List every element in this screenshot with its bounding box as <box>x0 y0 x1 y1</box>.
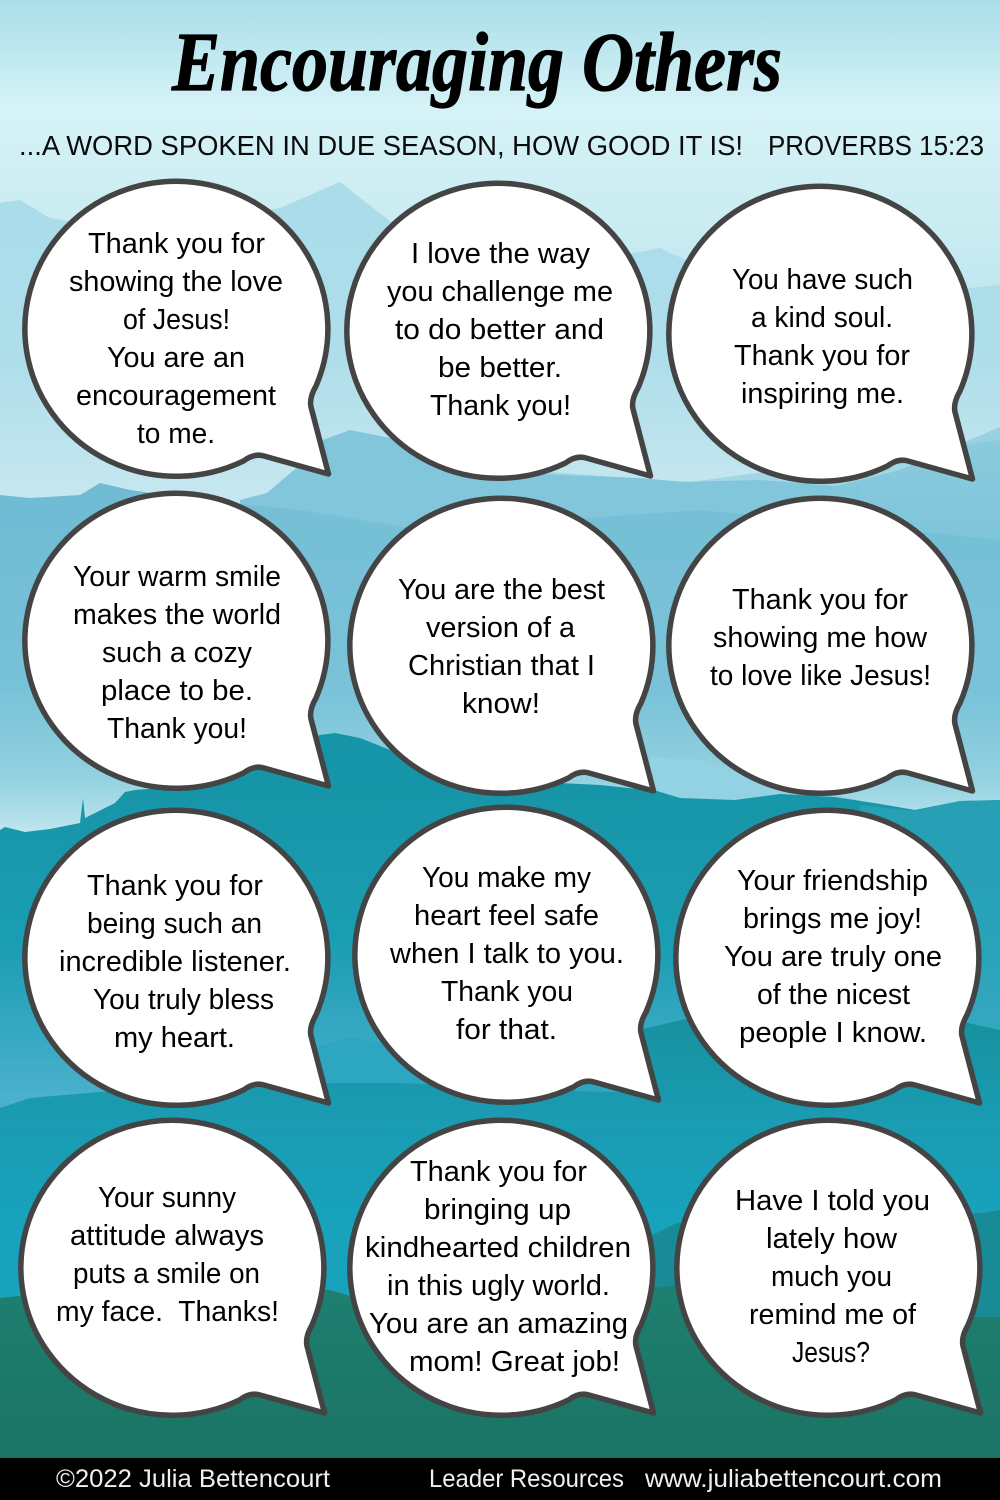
speech bubble 9: people I know. <box>739 1017 927 1049</box>
speech bubble 5: Christian that I <box>408 650 595 682</box>
speech bubble 2: be better. <box>438 352 562 384</box>
speech bubble 1: to me. <box>137 418 215 450</box>
speech bubble 5: You are the best <box>398 574 605 606</box>
speech bubble 10 <box>21 1120 324 1415</box>
speech bubble 8: You make my <box>422 862 591 894</box>
speech bubble 12: Jesus? <box>792 1337 870 1369</box>
speech bubble 1: showing the love <box>69 266 283 298</box>
speech bubble 1 <box>25 181 328 476</box>
footer bar <box>0 1458 1000 1500</box>
speech bubble 11: in this ugly world. <box>387 1270 610 1302</box>
title: Encouraging Others <box>171 16 782 109</box>
speech bubble 7: my heart. <box>114 1022 235 1054</box>
speech bubble 6 <box>669 498 972 793</box>
speech bubble 10: my face. Thanks! <box>56 1296 279 1328</box>
speech bubble 8: for that. <box>456 1014 557 1046</box>
subtitle: scripture quote: ...A WORD SPOKEN IN DUE SEASON, HOW GOOD IT IS! <box>19 130 743 161</box>
speech bubble 3: a kind soul. <box>751 302 893 334</box>
speech bubble 1: encouragement <box>76 380 276 412</box>
footer bar: Leader Resources <box>429 1465 624 1493</box>
speech bubble 1: You are an <box>107 342 245 374</box>
speech bubble 8 <box>355 807 658 1102</box>
speech bubble 2 <box>347 183 650 478</box>
speech bubble 1: of Jesus! <box>123 304 230 336</box>
speech bubble 7: Thank you for <box>87 870 263 902</box>
speech bubble 2: I love the way <box>411 238 590 270</box>
speech bubble 3 <box>669 186 972 481</box>
speech bubble 4: Your warm smile <box>73 561 281 593</box>
speech bubble 8: when I talk to you. <box>389 938 624 970</box>
speech bubble 6: Thank you for <box>732 584 908 616</box>
speech bubble 4: Thank you! <box>107 713 247 745</box>
speech bubble 8: heart feel safe <box>414 900 599 932</box>
speech bubble 7 <box>25 810 328 1105</box>
speech bubble 11: mom! Great job! <box>409 1346 620 1378</box>
speech bubble 9: You are truly one <box>724 941 942 973</box>
footer bar: ©2022 Julia Bettencourt <box>56 1465 330 1493</box>
speech bubble 11: Thank you for <box>410 1156 587 1188</box>
speech bubble 9: of the nicest <box>757 979 910 1011</box>
speech bubble 8: Thank you <box>441 976 573 1008</box>
speech bubble 11: bringing up <box>424 1194 571 1226</box>
speech bubble 7: incredible listener. <box>59 946 291 978</box>
footer bar: www.juliabettencourt.com <box>644 1465 942 1493</box>
speech bubble 1: Thank you for <box>88 228 265 260</box>
speech bubble 2: to do better and <box>395 314 604 346</box>
subtitle: scripture quote: PROVERBS 15:23 <box>768 130 984 161</box>
speech bubble 9 <box>676 810 980 1105</box>
speech bubble 4: place to be. <box>101 675 253 707</box>
speech bubble 6: to love like Jesus! <box>710 660 931 692</box>
speech bubble 4: makes the world <box>73 599 281 631</box>
speech bubble 5: know! <box>462 688 540 720</box>
speech bubble 9: brings me joy! <box>743 903 922 935</box>
speech bubble 2: you challenge me <box>387 276 613 308</box>
speech bubble 5: version of a <box>426 612 576 644</box>
speech bubble 2: Thank you! <box>430 390 571 422</box>
speech bubble 7: being such an <box>87 908 262 940</box>
speech bubble 5 <box>350 498 654 793</box>
speech bubble 12 <box>677 1120 980 1415</box>
speech bubble 10: attitude always <box>70 1220 264 1252</box>
speech bubble 4: such a cozy <box>102 637 252 669</box>
speech bubble 4 <box>25 493 328 788</box>
speech bubble 12: remind me of <box>749 1299 917 1331</box>
speech bubble 12: Have I told you <box>735 1185 930 1217</box>
speech bubble 3: Thank you for <box>734 340 910 372</box>
speech bubble 11 <box>350 1120 654 1415</box>
speech bubble 7: You truly bless <box>93 984 274 1016</box>
speech bubble 10: Your sunny <box>98 1182 236 1214</box>
speech bubble 11: You are an amazing <box>369 1308 628 1340</box>
speech bubble 11: kindhearted children <box>365 1232 631 1264</box>
speech bubble 10: puts a smile on <box>73 1258 260 1290</box>
speech bubble 12: lately how <box>766 1223 898 1255</box>
speech bubble 6: showing me how <box>713 622 928 654</box>
speech bubble 12: much you <box>771 1261 892 1293</box>
speech bubble 3: inspiring me. <box>741 378 904 410</box>
speech bubble 3: You have such <box>732 264 913 296</box>
speech bubble 9: Your friendship <box>737 865 928 897</box>
